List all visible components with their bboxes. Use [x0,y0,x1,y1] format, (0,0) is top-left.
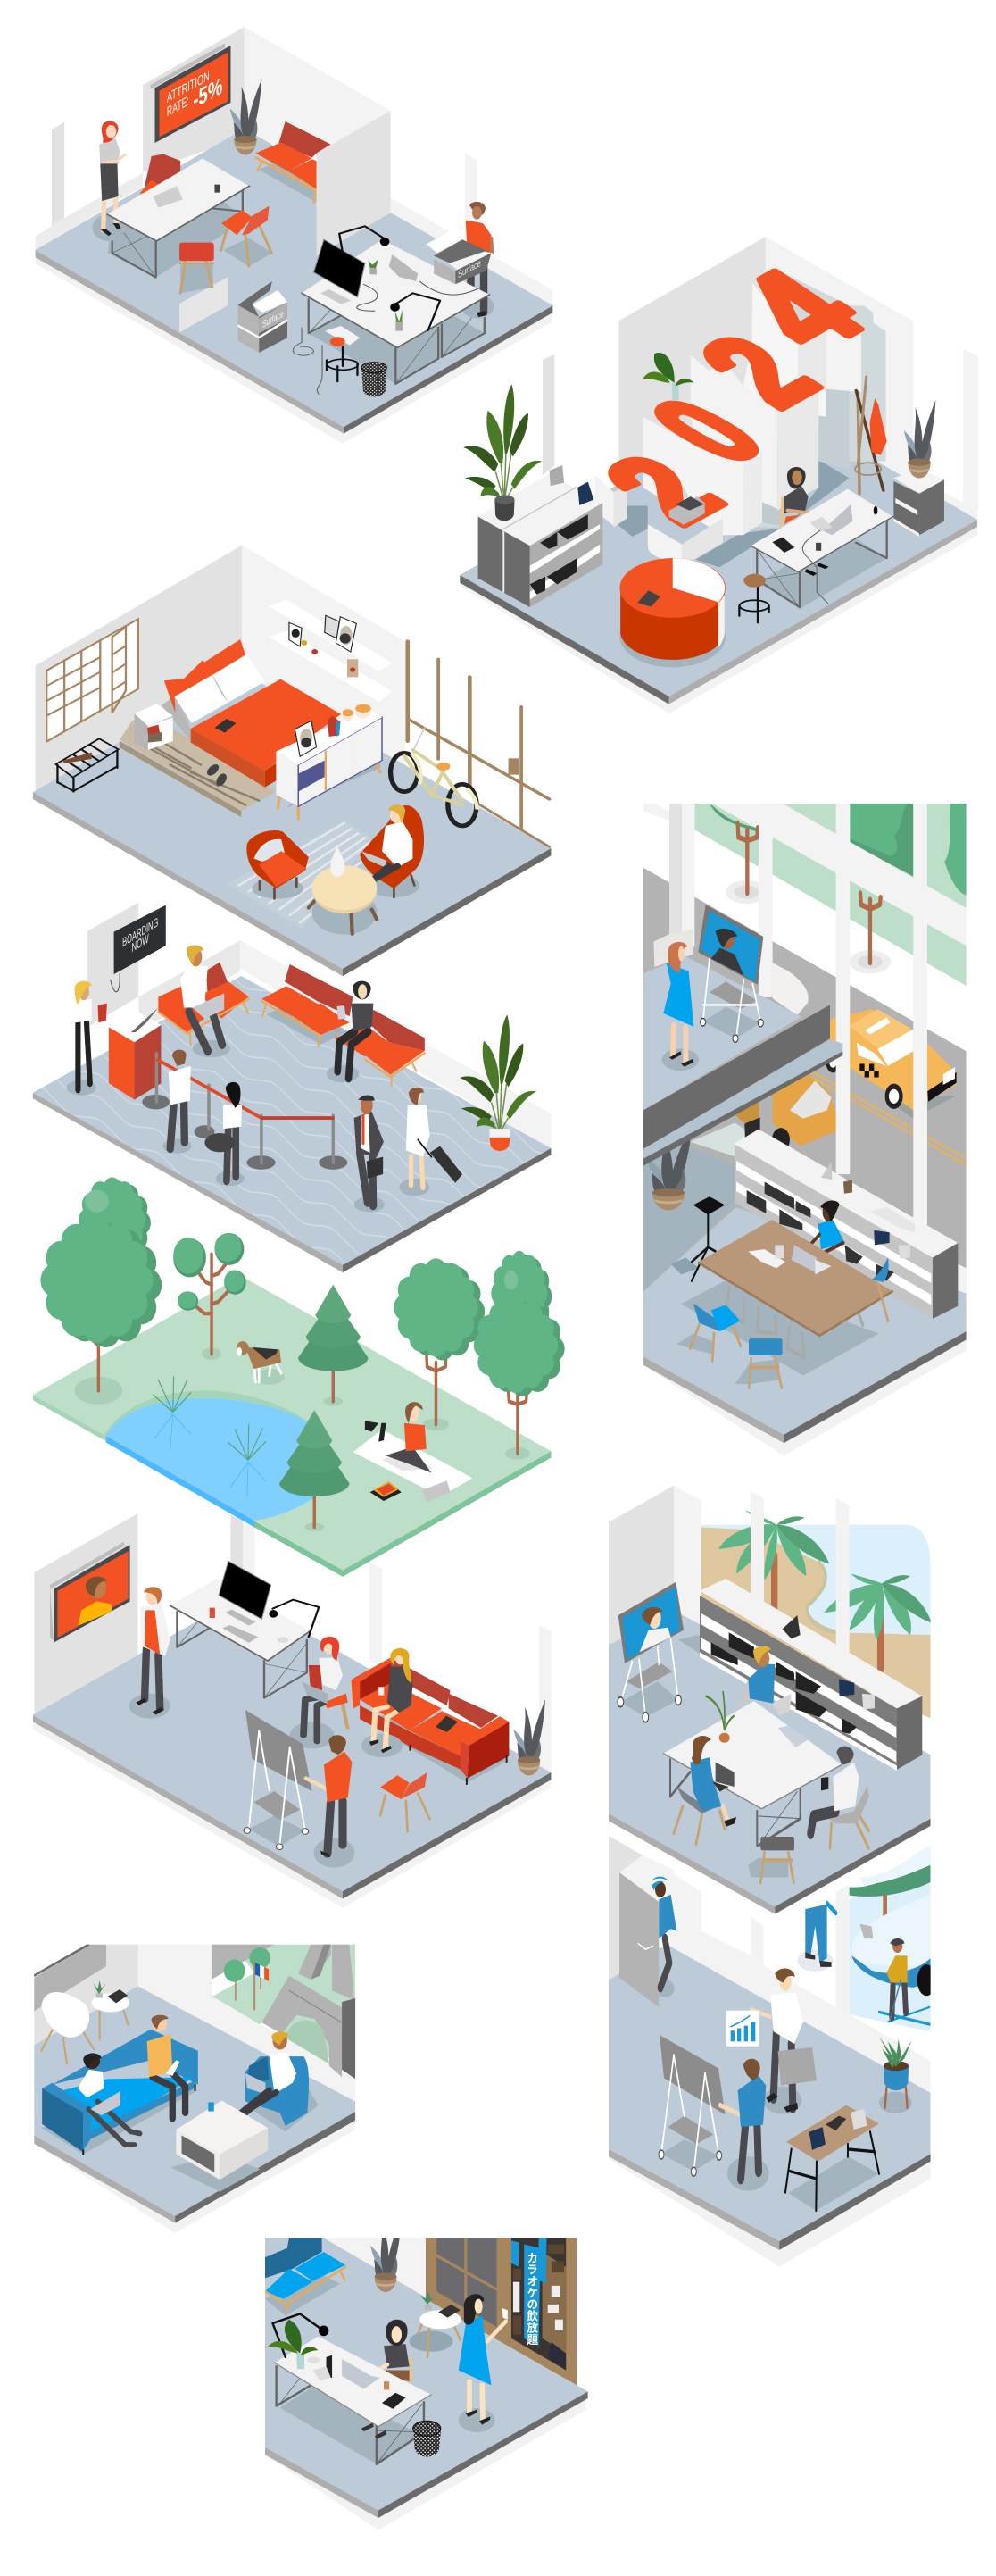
number: 2024: 4 [705,248,896,372]
room: taxi street mezzanine [643,804,967,1455]
person: woman left with laptop [674,1736,736,1844]
room: presentation space [33,1513,551,1908]
shell chair [41,1992,95,2064]
street backdrop [643,804,967,1333]
walls [87,903,551,1148]
desk top with items [751,489,893,604]
trash bin [413,2421,441,2456]
plant: large potted [463,384,542,521]
person: man with open shirt [129,1587,170,1719]
walls [609,1486,674,1647]
trash bin [361,363,386,397]
person: woman with laptop on sofa [78,2053,140,2145]
person: red hair woman [92,121,125,241]
tree: three balls [173,1233,246,1360]
plant: large in red pot [460,1015,536,1151]
room: bedroom studio [33,546,551,976]
person: woman in blue dress [662,942,699,1071]
chairs: blue [676,1303,741,1361]
floor [609,1946,931,2241]
wall screen: attrition rate [151,43,230,143]
wood table with books [785,2105,879,2210]
chair: orange right [220,206,273,266]
floor [33,671,551,969]
window: Paris view [212,1945,355,2079]
lamp [273,2313,328,2357]
video cart [618,1582,684,1722]
plant: blue pot [879,2037,912,2113]
person: skier [886,1938,908,2022]
rolling whiteboard [244,1710,312,1850]
room: attrition rate office [36,27,552,444]
stool [739,574,769,622]
person: presenter in blue [720,2059,769,2191]
bench sofa: right [334,1010,425,1086]
box: Surface held: Surface [458,257,481,281]
cables [293,328,322,395]
sofa [255,121,331,203]
block: first 2 extrusion [594,475,614,526]
wall screen: attrition rate: -5% [193,72,222,114]
person: seated at desk [361,2320,411,2439]
person: suit man presenting [751,1968,817,2113]
towel and woman [353,1402,472,1496]
window: beach [701,1525,931,1718]
person: blonde on couch [361,1648,412,1757]
desk [170,1561,311,1698]
wall screen: attrition rate: RATE: [167,94,189,121]
room: paris lounge [34,1945,355,2233]
video cart [698,905,763,1042]
desk frames [309,286,485,384]
walls [36,546,242,792]
carpet floor [33,976,551,1265]
blue sofa [41,2030,198,2155]
park scene [33,1178,565,1577]
person: carrying box [461,202,494,319]
sign: boarding now: BOARDING [122,914,158,950]
room: Japan office [265,2215,588,2530]
podium [109,1007,161,1100]
number: 2024: 0 [620,380,794,481]
person: presenter in orange [306,1735,354,1868]
tripod projector [671,1196,725,1280]
floor [265,2238,588,2511]
floor [36,129,552,427]
block: 0 extrusion [643,417,743,535]
rug [227,821,372,929]
floor [460,398,977,696]
desk top with computer [302,239,490,347]
chair: front [179,243,214,293]
posts: partition [408,641,550,846]
person: red hair seated with laptop [290,1637,350,1748]
box: Surface stack: Surface [262,308,284,330]
sideboard [276,704,382,819]
floor [609,1613,931,1906]
partition wall [317,111,391,256]
shoes [365,1421,386,1442]
mezzanine slab [643,956,842,1166]
white parked car [773,963,809,1015]
floor [34,1986,355,2216]
desk frame [277,2366,424,2464]
wall screen: video call [50,1542,130,1642]
long shelf [734,1117,958,1319]
small cabinet with plant [893,400,944,537]
room: ski scene lower [609,1836,936,2267]
walls and pillars [34,1513,137,1714]
person: walking out of frame in blue [797,1904,836,1972]
wall screen: attrition rate: ATTRITION [167,68,210,106]
nightstand [135,704,173,750]
table top [107,158,250,241]
wall: back left [143,27,245,172]
lamps [339,226,440,330]
coffee table [309,844,377,935]
window pillars [669,804,927,1225]
fir tree: front [279,1410,350,1531]
number: 2024 [572,248,896,543]
meeting table [663,1691,842,1846]
tree: large left [40,1178,162,1405]
lower room shadowed floor [643,1144,735,1291]
vase plant [268,2320,319,2369]
person: dark hair at desk [781,467,822,526]
coat rack [855,377,887,494]
person: seated woman [327,981,373,1082]
plant: snake plant [513,1699,545,1775]
stool with orange seat [325,326,360,381]
walls and door frame [609,1836,643,1882]
number: 2024: 2 [572,436,753,543]
shelf unit [478,465,602,607]
yellow taxi [826,1009,957,1119]
room: 2024 office [460,237,978,713]
wall: left [619,237,766,483]
egg chair with person [352,804,424,897]
floor [33,1596,551,1891]
desk [757,518,887,609]
window: shoji [46,619,138,742]
person: man on sofa [147,2015,186,2119]
reeds [154,1377,266,1496]
books [370,1481,402,1501]
person: standing woman [459,2294,508,2432]
printer [669,496,705,525]
lower floor [643,1207,967,1435]
person: seated blond [180,946,230,1057]
cast shadows of digits on wall [767,276,886,462]
block: digit 4 extrusion [743,283,826,417]
desk top with items [275,2337,431,2427]
sign: boarding now: NOW [131,930,149,955]
long shelf [700,1579,922,1771]
chart card [726,2011,759,2047]
tree: round [394,1258,485,1430]
blue bench [265,2238,345,2316]
vase plant [643,353,693,401]
lawn [33,1276,551,1571]
bench sofa: centre [261,964,353,1046]
tree: tall right [474,1251,565,1459]
palm trees [718,1510,931,1669]
bench sofa: left [158,963,249,1046]
plant: snake plant [230,79,261,154]
plant: snake plant lower [648,1132,691,1211]
chair [380,1772,430,1832]
sign: boarding now [111,905,166,992]
box: Surface held [427,229,493,284]
person: woman with suitcase [400,1087,462,1196]
number: 2024: 2 [668,315,849,427]
person: winter hat at door [651,1877,676,1988]
laptop [422,1480,451,1502]
side table [92,1980,129,2039]
orange car [735,1074,836,1152]
dog [237,1341,285,1385]
bicycle [391,728,477,826]
plant: snake plant [370,2215,402,2292]
shoe rack [56,738,119,792]
window: Japanese street view [426,2238,577,2385]
window: Japanese street view: カラオケの飲放題 [525,2252,538,2347]
pie cylinder table [619,558,726,667]
side table [410,2291,461,2357]
stanchions and rope [142,1054,347,1170]
desk lamp [269,1600,319,1637]
person: queue man [162,1050,191,1154]
box: Surface stack [238,281,287,353]
person: seated in blue [810,1200,845,1253]
couch [352,1658,509,1784]
armchair [246,830,309,899]
room: beach meeting upper [609,1486,931,1914]
fir tree: back [298,1285,369,1405]
walls [34,1945,138,2045]
rolling whiteboard [659,2035,726,2176]
barrel chair and man [235,2031,319,2131]
bed [120,639,341,817]
shelves with art [270,600,392,702]
person: staff [67,981,107,1096]
window: ski slope [850,1846,936,2031]
cube table [170,2100,268,2192]
person: seated top blue [738,1646,792,1716]
chair: behind table [139,154,180,194]
person: suit man [354,1096,385,1213]
door [619,1872,675,2007]
table [108,190,245,278]
room: boarding lounge [33,903,551,1272]
person: queue woman [204,1082,245,1186]
block: second 2 extrusion [691,355,777,509]
stool [748,1837,794,1882]
meeting table [681,1220,892,1376]
pond [104,1390,315,1527]
person: man right [810,1747,869,1848]
